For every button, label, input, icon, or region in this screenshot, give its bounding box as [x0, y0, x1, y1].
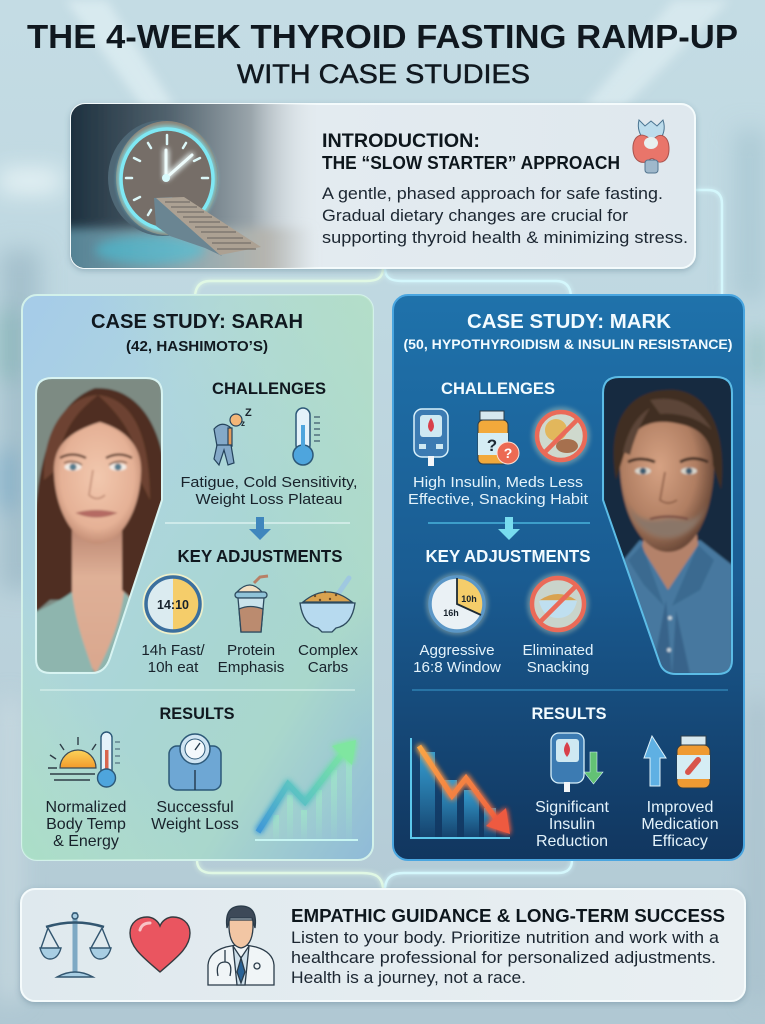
text: Sarah adjustment labels: 10h eat: [148, 659, 199, 676]
text: Sarah result labels: Body Temp: [46, 816, 126, 833]
text: empathic guidance body: Health is a journey, not a race.: [291, 969, 526, 987]
icon: 16:8 clock: 10h: [461, 594, 477, 604]
heading: Mark: CASE STUDY: MARK: [467, 311, 672, 333]
heading: Sarah: [91, 311, 303, 355]
panel: case study Mark: [393, 295, 744, 860]
text: Mark result labels: Insulin: [549, 816, 595, 833]
text: Mark result labels: Significant: [535, 799, 609, 816]
heading: Sarah key adjustments: KEY ADJUSTMENTS: [178, 546, 342, 566]
icon: thyroid gland: [633, 120, 669, 173]
text: Mark result labels: Efficacy: [652, 833, 708, 850]
heading: Mark challenges: CHALLENGES: [441, 379, 555, 398]
icon: doctor: [208, 906, 274, 985]
icon: glucose meter: [414, 409, 448, 466]
text: Sarah challenges: [180, 474, 358, 508]
icon: medication bottle with question mark: [478, 411, 519, 464]
text: Sarah challenges: Weight Loss Plateau: [196, 491, 342, 508]
heading: Sarah results: RESULTS: [160, 704, 234, 723]
icon: no snacking: [532, 407, 590, 465]
text: empathic guidance body: [291, 929, 720, 987]
text: Sarah result labels: Successful: [156, 799, 234, 816]
portrait: Sarah: [34, 378, 167, 673]
icon: fatigued person: Z: [245, 407, 252, 419]
text: empathic guidance body: healthcare professional for personalized adjustments.: [291, 949, 716, 967]
arrow: challenges to adjustments, Mark: [428, 517, 590, 540]
heading: introduction: THE “SLOW STARTER” APPROACH: [322, 153, 620, 173]
text: Sarah adjustment labels: Emphasis: [218, 659, 285, 676]
heading: Sarah: CASE STUDY: SARAH: [91, 311, 303, 333]
chart: falling trend: [411, 738, 510, 838]
text: Sarah adjustment labels: Complex: [298, 642, 358, 659]
text: Sarah result labels: & Energy: [53, 833, 119, 850]
text: Mark result labels: Medication: [641, 816, 719, 833]
text: Mark result labels: [535, 799, 719, 850]
text: Mark adjustment labels: Eliminated: [523, 642, 593, 659]
icon: thermometer: [293, 408, 320, 465]
icon: 14:10 clock: 14:10: [157, 597, 189, 612]
heading: Mark: (50, HYPOTHYROIDISM & INSULIN RESISTANCE): [404, 336, 732, 352]
panel: case study Sarah: [22, 295, 373, 860]
icon: protein shake: [235, 576, 268, 632]
heading: introduction: [322, 131, 620, 173]
text: Mark challenges: High Insulin, Meds Less: [413, 474, 583, 491]
icon: no bowl: [527, 573, 589, 635]
text: Sarah adjustment labels: Protein: [227, 642, 275, 659]
icon: fatigued person: z: [241, 419, 245, 428]
text: Sarah result labels: Weight Loss: [151, 816, 239, 833]
arrow: challenges to adjustments, Sarah: [165, 517, 350, 540]
icon: up arrow and medication bottle: [644, 736, 710, 788]
portrait: Mark: [603, 377, 732, 674]
icon: fatigued person: [214, 407, 252, 465]
text: Mark challenges: [408, 474, 589, 508]
heading: Mark key adjustments: KEY ADJUSTMENTS: [426, 546, 590, 566]
panel: empathic guidance: [21, 889, 745, 1001]
heading: empathic guidance: EMPATHIC GUIDANCE & LONG-TERM SUCCESS: [291, 905, 725, 926]
text: introduction body: A gentle, phased approach for safe fasting.: [322, 184, 663, 203]
text: Mark result labels: Reduction: [536, 833, 608, 850]
icon: 14:10 clock: [144, 575, 202, 633]
icon: medication bottle with question mark: ?: [504, 445, 512, 461]
heading: Sarah: (42, HASHIMOTO’S): [126, 339, 268, 355]
heading: Sarah challenges: CHALLENGES: [212, 379, 326, 398]
title: WITH CASE STUDIES: [237, 59, 530, 89]
icon: balance scales: [40, 912, 111, 977]
text: Mark challenges: Effective, Snacking Habit: [408, 491, 589, 508]
chart: rising trend: [255, 740, 358, 840]
icon: weighing scale: [169, 734, 221, 790]
text: empathic guidance body: Listen to your body. Prioritize nutrition and work with a: [291, 929, 720, 947]
heading: Mark: [404, 311, 732, 352]
text: Mark adjustment labels: Aggressive: [419, 642, 495, 659]
text: Sarah challenges: Fatigue, Cold Sensitivity,: [180, 474, 358, 491]
icon: medication bottle with question mark: ?: [487, 436, 497, 455]
connectors: introduction to case studies: [195, 190, 722, 296]
illustration: clock and staircase: [71, 104, 312, 268]
text: Sarah adjustment labels: [141, 642, 358, 676]
icon: heart: [130, 917, 190, 972]
text: Sarah adjustment labels: 14h Fast/: [141, 642, 205, 659]
text: introduction body: Gradual dietary changes are crucial for: [322, 206, 628, 225]
icon: 16:8 clock: 16h: [443, 608, 459, 618]
icon: sun and thermometer: [48, 732, 120, 787]
title: THE 4-WEEK THYROID FASTING RAMP-UP: [27, 18, 738, 55]
text: Mark result labels: Improved: [647, 799, 713, 816]
text: Sarah adjustment labels: Carbs: [308, 659, 349, 676]
icon: glucose meter with down arrow: [551, 733, 603, 792]
icon: bowl of complex carbs: [300, 578, 355, 632]
text: Mark adjustment labels: 16:8 Window: [413, 659, 501, 676]
panel: introduction: [60, 104, 695, 278]
connectors: case studies to footer: [197, 860, 572, 888]
text: Mark adjustment labels: Snacking: [527, 659, 589, 676]
heading: Mark results: RESULTS: [532, 704, 606, 723]
text: Sarah result labels: Normalized: [46, 799, 126, 816]
icon: 16:8 clock: [426, 573, 488, 635]
heading: introduction: INTRODUCTION:: [322, 131, 480, 152]
text: Sarah result labels: [46, 799, 239, 850]
text: Mark adjustment labels: [413, 642, 593, 676]
text: introduction body: [322, 184, 688, 247]
text: introduction body: supporting thyroid health & minimizing stress.: [322, 228, 688, 247]
title: [27, 18, 738, 89]
